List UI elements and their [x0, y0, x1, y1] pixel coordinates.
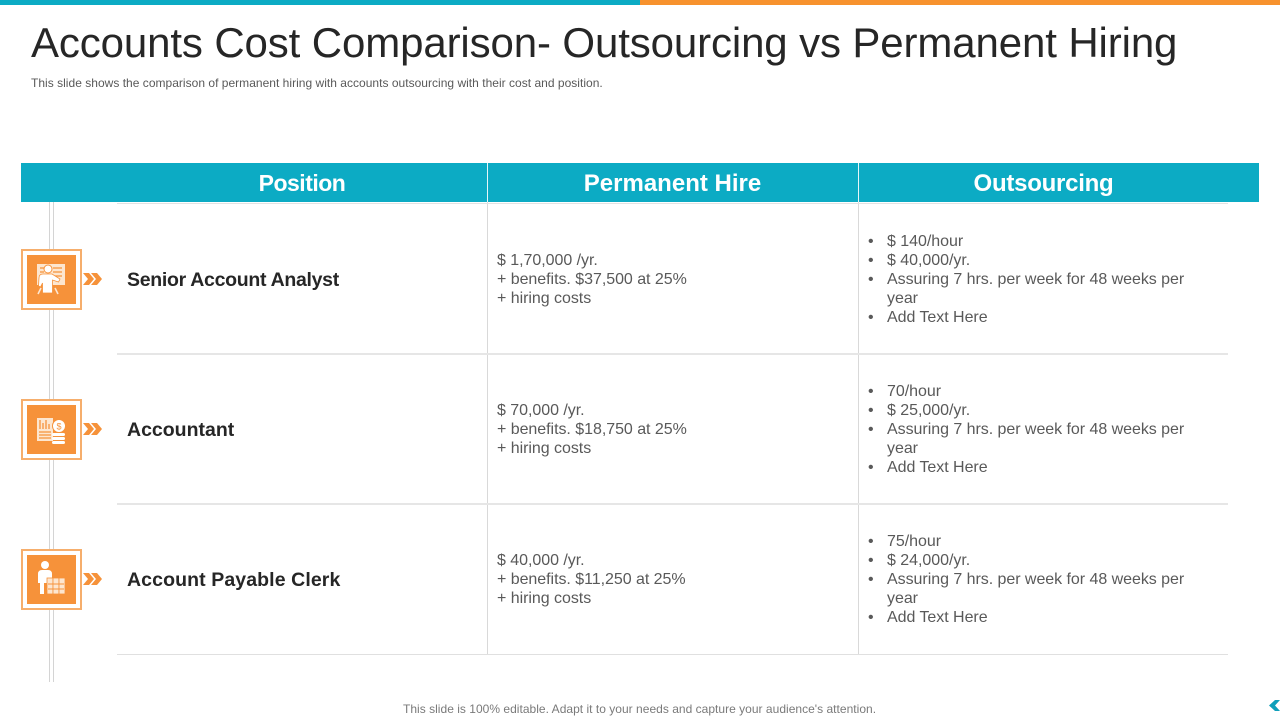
outsourcing list 3: •	[868, 571, 874, 588]
outsourcing list 3: $ 24,000/yr.	[887, 552, 970, 569]
table header bar	[21, 163, 1259, 202]
outsourcing list 1: •	[868, 233, 874, 250]
position: Account Payable Clerk: Account Payable Clerk	[127, 569, 340, 591]
permanent hire cost 1: + hiring costs	[497, 290, 591, 307]
permanent hire cost 2: + benefits. $18,750 at 25%	[497, 421, 687, 438]
icon: presenter at board	[21, 249, 82, 310]
permanent hire cost 3: $ 40,000 /yr.	[497, 552, 585, 569]
outsourcing list 3: •	[868, 552, 874, 569]
outsourcing list 2: •	[868, 383, 874, 400]
outsourcing list 3: •	[868, 533, 874, 550]
icon: accounting calculator and coins	[21, 399, 82, 460]
outsourcing list 2: 70/hour	[887, 383, 941, 400]
title: Accounts Cost Comparison- Outsourcing vs Permanent Hiring	[31, 19, 1177, 66]
position: Accountant: Accountant	[127, 419, 234, 441]
outsourcing list 2	[868, 383, 1184, 476]
header: Permanent Hire: Permanent Hire	[584, 170, 761, 197]
vertical timeline rails	[49, 202, 54, 682]
outsourcing list 3: Assuring 7 hrs. per week for 48 weeks per	[887, 571, 1184, 588]
outsourcing list 2: •	[868, 421, 874, 438]
permanent hire cost 3: + hiring costs	[497, 590, 591, 607]
permanent hire cost 2: $ 70,000 /yr.	[497, 402, 585, 419]
header: Position: Position	[259, 170, 345, 196]
outsourcing list 2: Assuring 7 hrs. per week for 48 weeks per	[887, 421, 1184, 438]
outsourcing list 1: $ 40,000/yr.	[887, 252, 970, 269]
chevrons 2	[83, 423, 102, 435]
outsourcing list 1: •	[868, 271, 874, 288]
header: Outsourcing: Outsourcing	[974, 170, 1113, 197]
permanent hire cost 2: + hiring costs	[497, 440, 591, 457]
outsourcing list 2: •	[868, 402, 874, 419]
chevrons 3	[83, 573, 102, 585]
outsourcing list 2: •	[868, 459, 874, 476]
chevrons 1	[83, 273, 102, 285]
permanent hire cost 3	[497, 552, 686, 607]
outsourcing list 1	[868, 233, 1184, 326]
outsourcing list 1: •	[868, 252, 874, 269]
outsourcing list 3	[868, 533, 1184, 626]
subtitle: This slide shows the comparison of permanent hiring with accounts outsourcing with their cost and position.	[31, 76, 603, 90]
permanent hire cost 1	[497, 252, 687, 307]
outsourcing list 3: Add Text Here	[887, 609, 988, 626]
outsourcing list 1: •	[868, 309, 874, 326]
outsourcing list 1: Add Text Here	[887, 309, 988, 326]
top accent bar	[0, 0, 1280, 5]
outsourcing list 2: Add Text Here	[887, 459, 988, 476]
permanent hire cost 1: + benefits. $37,500 at 25%	[497, 271, 687, 288]
outsourcing list 2: year	[887, 440, 918, 457]
icon: accounting calculator and coins: $	[56, 422, 62, 432]
permanent hire cost 3: + benefits. $11,250 at 25%	[497, 571, 686, 588]
icon: back arrow	[1269, 700, 1280, 711]
permanent hire cost 2	[497, 402, 687, 457]
icon: clerk with filing cabinets	[21, 549, 82, 610]
footer note: This slide is 100% editable. Adapt it to your needs and capture your audience's attention.	[403, 702, 876, 716]
orange segment	[640, 0, 1280, 5]
outsourcing list 1: $ 140/hour	[887, 233, 963, 250]
outsourcing list 3: •	[868, 609, 874, 626]
permanent hire cost 1: $ 1,70,000 /yr.	[497, 252, 598, 269]
outsourcing list 1: year	[887, 290, 918, 307]
outsourcing list 2: $ 25,000/yr.	[887, 402, 970, 419]
outsourcing list 1: Assuring 7 hrs. per week for 48 weeks per	[887, 271, 1184, 288]
teal segment	[0, 0, 640, 5]
position: Senior Account Analyst: Senior Account Analyst	[127, 269, 339, 291]
outsourcing list 3: year	[887, 590, 918, 607]
outsourcing list 3: 75/hour	[887, 533, 941, 550]
